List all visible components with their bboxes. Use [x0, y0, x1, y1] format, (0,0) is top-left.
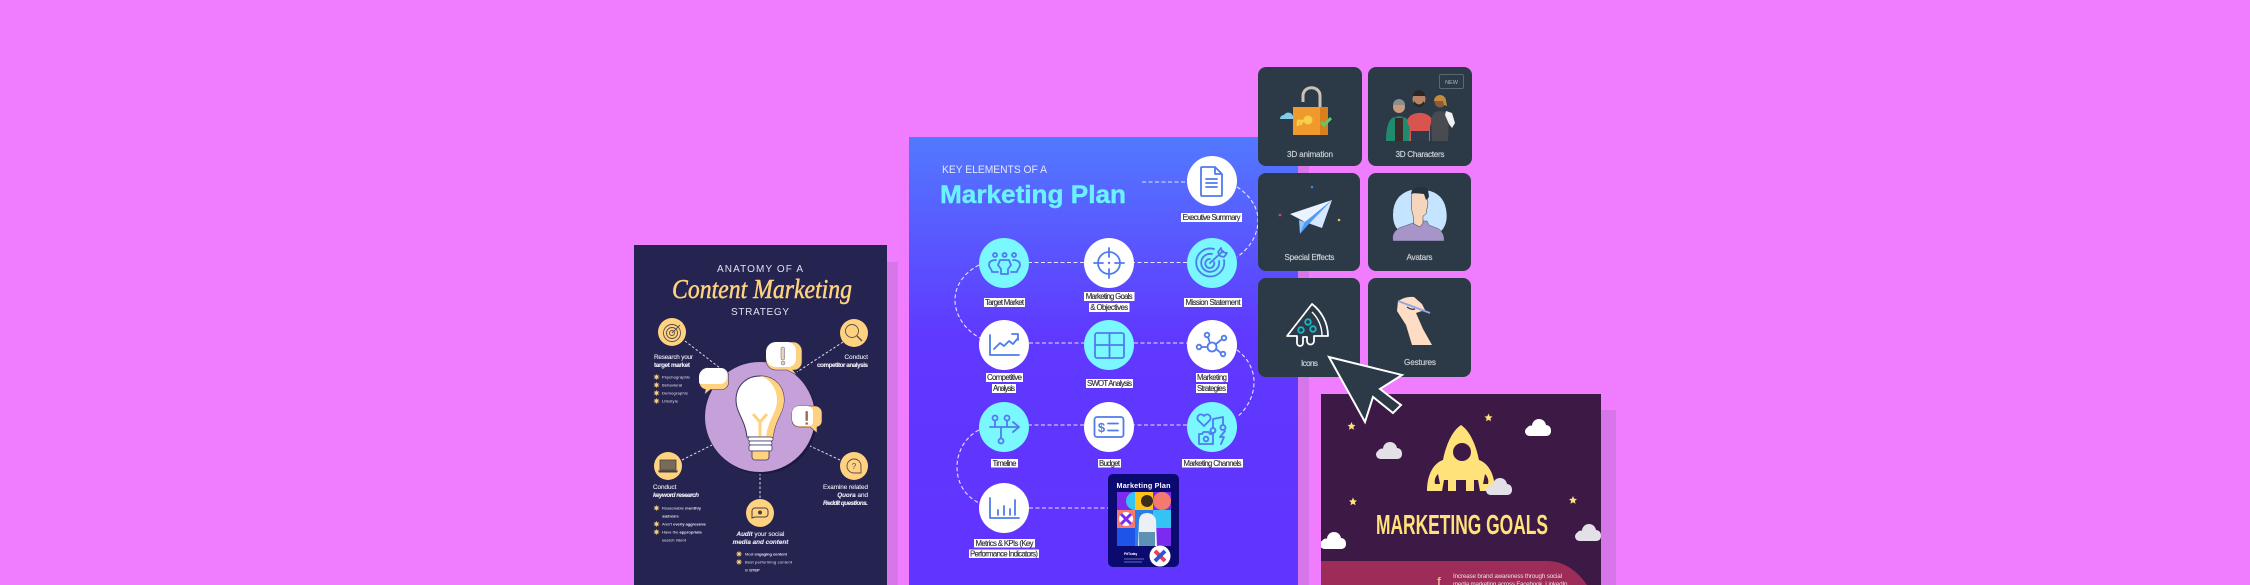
tile: avatars: Avatars — [1406, 253, 1432, 262]
text: keyword research: keyword research — [653, 492, 699, 499]
tile: 3d animation: 3D animation — [1287, 150, 1333, 159]
icon: pizza slice — [1287, 304, 1328, 346]
icon: light bulb — [736, 376, 784, 460]
node: marketing goals: Marketing Goals — [1086, 292, 1133, 301]
text: research target market: target market — [654, 362, 691, 369]
icon: laptop — [654, 452, 682, 480]
panel: content marketing strategy — [634, 245, 898, 585]
node: budget: Budget — [1099, 459, 1121, 468]
node: executive summary: Executive Summary — [1182, 213, 1241, 222]
text: quora and reddit: Examine related — [823, 484, 868, 491]
tile: special effects: Special Effects — [1284, 253, 1334, 262]
panel: marketing goals — [1320, 394, 1616, 585]
poster thumbnail: Marketing Plan — [1116, 481, 1170, 490]
poster thumbnail: PitToday — [1124, 552, 1137, 556]
band — [1321, 561, 1587, 585]
heading: content marketing: Content Marketing — [672, 274, 852, 304]
panel: marketing plan shadow — [1298, 160, 1309, 585]
node: marketing goals: & Objectives — [1090, 303, 1128, 312]
icon: magnifier — [840, 319, 868, 347]
text: keyword research: Aren't overly aggressive — [662, 522, 707, 526]
text: keyword research: search intent — [662, 538, 687, 542]
icon: padlock — [1280, 88, 1331, 135]
icon: three characters — [1386, 90, 1455, 141]
icon: target — [658, 318, 686, 346]
text: keyword research — [653, 484, 707, 542]
text: competitor analysis: Conduct — [845, 354, 868, 361]
icon: question bubble — [840, 452, 868, 480]
heading: marketing plan: Marketing Plan — [940, 181, 1126, 209]
node: budget — [1084, 402, 1134, 468]
text: competitor analysis: competitor analysis — [817, 362, 868, 369]
tile: gestures: Gestures — [1404, 358, 1436, 367]
node: target market — [979, 238, 1029, 307]
text: keyword research: Reasonable monthly — [662, 506, 702, 510]
tile: icons — [1258, 278, 1360, 377]
node: competitive analysis — [979, 320, 1029, 393]
node: marketing strategies — [1187, 320, 1237, 393]
node: competitive analysis: Analysis — [993, 384, 1015, 393]
heading: strategy: STRATEGY — [731, 307, 789, 318]
icon: hand with pen — [1397, 297, 1432, 345]
icon: question bubble: ? — [852, 462, 857, 471]
node: target market: Target Market — [985, 298, 1025, 307]
text: keyword research: search volume — [662, 514, 680, 518]
text: competitor analysis — [817, 354, 868, 369]
node: mission statement: Mission Statement — [1186, 298, 1241, 307]
text: audit social media: in STEP — [745, 568, 760, 572]
big purple circle — [705, 362, 817, 474]
text: research target market — [654, 354, 693, 404]
tile: special effects — [1258, 173, 1360, 271]
tile: avatars — [1368, 173, 1471, 271]
heading: marketing goals: MARKETING GOALS — [1376, 509, 1548, 540]
node: metrics and kpis — [969, 483, 1039, 558]
node: marketing strategies: Strategies — [1197, 384, 1226, 393]
stars — [1348, 414, 1577, 505]
heading: anatomy of a: ANATOMY OF A — [717, 264, 803, 275]
text: keyword research: Conduct — [653, 484, 677, 491]
node: swot analysis — [1084, 320, 1134, 388]
poster thumbnail — [1108, 474, 1179, 567]
node: marketing strategies: Marketing — [1197, 373, 1227, 382]
text: audit social media: Audit your social — [736, 531, 784, 538]
tile: icons: Icons — [1301, 359, 1318, 368]
node: marketing goals — [1084, 238, 1134, 312]
node: marketing channels: Marketing Channels — [1184, 459, 1242, 468]
text: keyword research: Have the appropriate — [662, 530, 703, 534]
body text — [1453, 573, 1569, 585]
text: audit social media: Best performing content — [745, 560, 793, 564]
speech bubble: left — [699, 368, 729, 394]
panel: marketing plan — [909, 137, 1298, 585]
node: mission statement — [1184, 238, 1242, 307]
text: research target market: Demographic — [662, 390, 688, 396]
text: research target market: Psychographic — [662, 374, 690, 380]
connector lines — [682, 341, 843, 498]
dashed path — [955, 182, 1258, 508]
speech bubble: right — [792, 406, 822, 433]
icon: avatar — [1393, 187, 1447, 241]
node: competitive analysis: Competitive — [987, 373, 1022, 382]
node: metrics and kpis: Performance Indicators) — [970, 550, 1038, 558]
node: marketing channels — [1182, 402, 1243, 468]
icon: rocket — [1427, 425, 1495, 491]
arrow: cursor — [1329, 357, 1402, 422]
badge: new: NEW — [1445, 80, 1459, 86]
node: timeline: Timeline — [992, 459, 1016, 468]
clouds — [1320, 419, 1601, 549]
heading: key elements: KEY ELEMENTS OF A — [942, 164, 1048, 176]
text: research target market: Lifestyle — [662, 398, 679, 404]
tile: 3d animation — [1258, 67, 1362, 166]
tile: 3d characters — [1368, 67, 1472, 166]
tile: gestures — [1368, 278, 1471, 377]
node: timeline — [979, 402, 1029, 468]
node: metrics and kpis: Metrics & KPIs (Key — [976, 539, 1034, 548]
node: swot analysis: SWOT Analysis — [1087, 379, 1132, 388]
text: audit social media: media and content — [733, 539, 789, 546]
text: quora and reddit: Quora and — [837, 492, 868, 499]
text: quora and reddit — [823, 484, 868, 507]
speech bubble: top — [766, 342, 802, 375]
node: executive summary — [1181, 156, 1242, 222]
icon: paper plane — [1279, 186, 1340, 234]
node: budget: $ — [1098, 420, 1106, 435]
text: audit social media — [733, 531, 793, 572]
tile: 3d characters: 3D Characters — [1396, 150, 1444, 159]
icon: eye bubble — [746, 499, 774, 527]
body text: Increase brand awareness through social — [1453, 573, 1562, 580]
text: audit social media: Most engaging content — [745, 552, 788, 556]
text: research target market: Research your — [654, 354, 693, 361]
text: quora and reddit: Reddit questions. — [823, 500, 868, 507]
text: research target market: Behavioral — [662, 382, 682, 388]
